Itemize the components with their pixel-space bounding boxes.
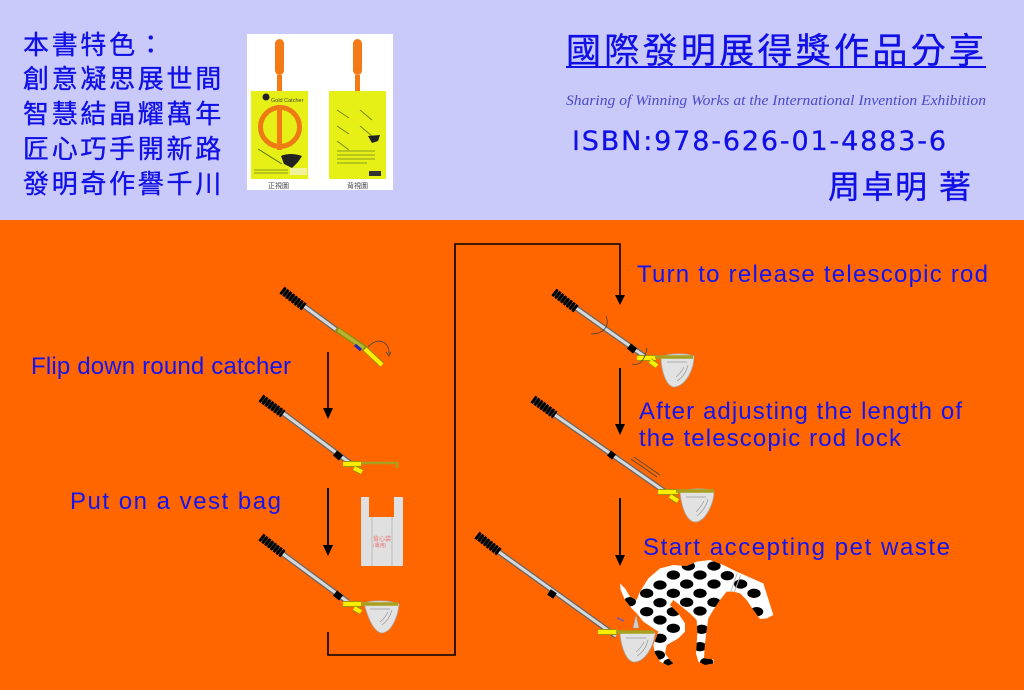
tool: extended rod (533, 399, 714, 522)
product thumbnail: front and back views: 背視圖 (347, 181, 368, 191)
product thumbnail: front and back views: Gold Catcher (271, 98, 304, 104)
poem text block (23, 30, 224, 199)
dalmatian dog (620, 560, 774, 666)
header band (0, 0, 1024, 220)
vest bag icon (361, 497, 403, 566)
author: 周卓明 著 (828, 169, 971, 205)
tool: catching under dog (477, 535, 616, 636)
poem text block: 智慧結晶耀萬年 (23, 99, 224, 129)
poem text block: 本書特色： (23, 30, 167, 60)
product thumbnail: front and back views (247, 34, 393, 191)
poem text block: 發明奇作譽千川 (23, 169, 224, 199)
tool: turn to release (554, 292, 694, 387)
arrow: step 4 to 5 (615, 368, 625, 435)
orange main background (0, 220, 1024, 690)
label: turn to release: Turn to release telescopic rod (637, 261, 988, 288)
label: put on bag: Put on a vest bag (70, 488, 281, 515)
tool: with net (261, 537, 399, 633)
title: 國際發明展得獎作品分享 (566, 32, 987, 71)
arrow: step 5 to 6 (615, 498, 625, 566)
label: adjust length: the telescopic rod lock (639, 425, 902, 452)
tool: closed catcher (282, 290, 391, 365)
ISBN: ISBN:978-626-01-4883-6 (572, 126, 946, 157)
connector arrow between columns (328, 244, 625, 655)
arrow: step 2 to 3 (323, 488, 333, 556)
label: flip down: Flip down round catcher (31, 353, 291, 380)
vest bag icon: 背心袋 (373, 534, 391, 543)
arrow: step 1 to 2 (323, 352, 333, 419)
vest bag icon: (專用) (373, 542, 387, 549)
tool: catcher flipped open (261, 398, 397, 472)
poem text block: 匠心巧手開新路 (23, 134, 224, 164)
label: adjust length (639, 398, 962, 452)
english subtitle: Sharing of Winning Works at the International Invention Exhibition (566, 93, 986, 109)
label: adjust length: After adjusting the length of (639, 398, 962, 425)
product thumbnail: front and back views: 正視圖 (268, 181, 289, 191)
net under dog (598, 615, 655, 662)
label: start accepting: Start accepting pet waste (643, 534, 950, 561)
poem text block: 創意凝思展世間 (23, 64, 224, 94)
